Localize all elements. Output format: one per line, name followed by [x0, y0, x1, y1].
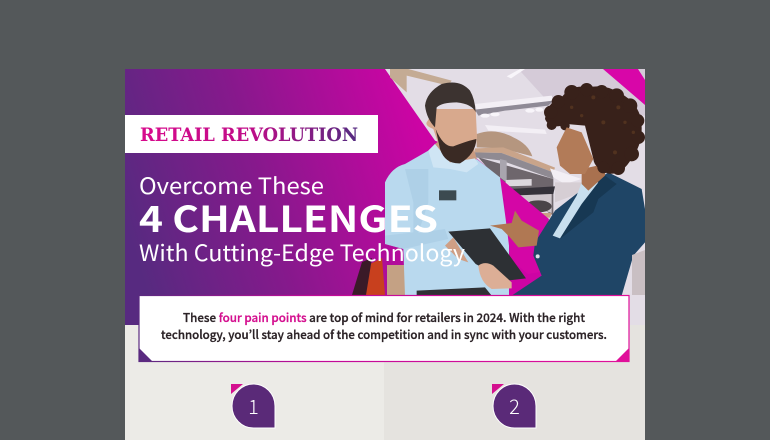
pointing hand [490, 211, 539, 247]
hero banner [125, 69, 645, 329]
lower hand [478, 263, 512, 289]
corner accent: bottom right [616, 348, 629, 361]
tablet [448, 228, 526, 281]
staff hand [445, 237, 468, 262]
headline line 1: Overcome These [139, 169, 324, 201]
corner accent: bottom left [139, 348, 152, 361]
face [426, 109, 477, 163]
dark figure behind staff [352, 258, 372, 295]
cuff detail [536, 254, 540, 258]
trousers [417, 287, 492, 296]
headline line 2: 4 CHALLENGES [139, 191, 438, 243]
curly hair [544, 83, 645, 175]
number badge 2 [492, 384, 536, 428]
red garment at left of staff [366, 258, 385, 295]
neck [435, 142, 477, 162]
headline line 3: With Cutting-Edge Technology [139, 236, 465, 268]
magenta band behind figures [500, 178, 549, 221]
lower panel: card column 2 [384, 325, 645, 440]
hair [425, 82, 476, 127]
hair curls [570, 95, 635, 154]
title tag [125, 115, 378, 153]
intro callout box [139, 296, 629, 362]
staff member [385, 82, 509, 296]
beard [436, 129, 476, 163]
number badge 1 [231, 384, 275, 428]
inner shirt [553, 182, 598, 238]
face [557, 127, 593, 174]
intro text line 1: These four pain points are top of mind for retailers in 2024. With the right [183, 309, 585, 326]
collar [428, 144, 478, 172]
title text: RETAIL REVOLUTION [140, 125, 358, 146]
name badge [439, 190, 456, 200]
headline [139, 169, 465, 268]
lower panel: card column 1 [125, 325, 384, 440]
intro text line 2: technology, you’ll stay ahead of the competition and in sync with your customers. [161, 326, 607, 343]
magenta triangle accent: top right [603, 69, 645, 105]
blazer [512, 172, 645, 296]
blazer lapel [560, 176, 617, 239]
customer in blazer [445, 83, 645, 296]
clothing rack at far right [632, 250, 645, 295]
infographic page [125, 69, 645, 440]
shirt [385, 144, 509, 296]
numeral 1: 1 [248, 391, 259, 420]
neck [582, 164, 605, 191]
shirt shading [385, 169, 448, 249]
numeral 2: 2 [509, 391, 520, 420]
tan shelf behind staff [387, 265, 405, 295]
store photo backdrop [385, 69, 645, 329]
